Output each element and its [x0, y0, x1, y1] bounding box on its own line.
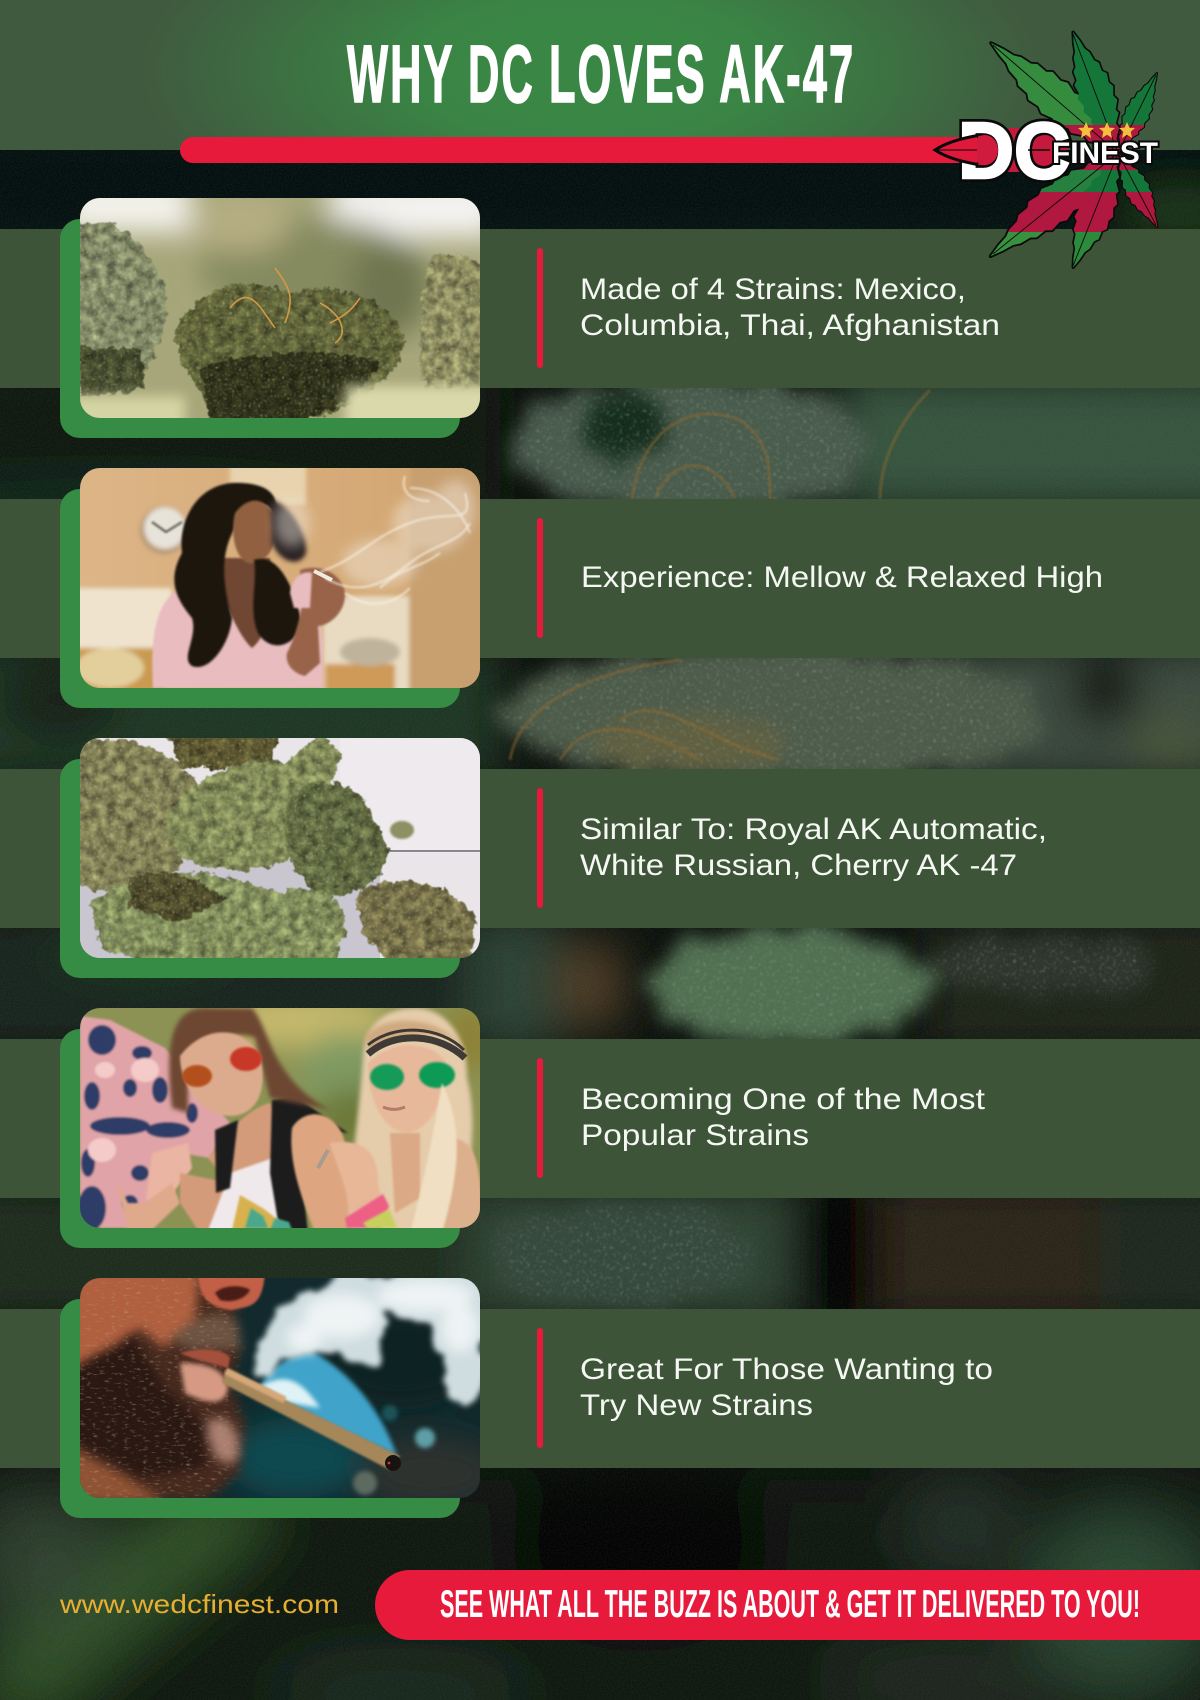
- red accent bar: [537, 248, 543, 368]
- red accent bar: [537, 1328, 543, 1448]
- red accent bar: [537, 788, 543, 908]
- text: strains: Made of 4 Strains: Mexico,: [580, 273, 966, 306]
- logo: DC Finest leaf emblem: DC: [958, 106, 1070, 195]
- title: WHY DC LOVES AK-47: [347, 28, 853, 119]
- text: similar strains: White Russian, Cherry AK -47: [580, 849, 1017, 882]
- photo: two women with sunglasses: [80, 1008, 480, 1228]
- text: strains: [580, 273, 1000, 342]
- strip: [0, 1039, 1200, 1198]
- text: similar strains: Similar To: Royal AK Automatic,: [580, 813, 1047, 846]
- text: popularity: [581, 1083, 986, 1152]
- panel: similar strains: [0, 738, 1200, 978]
- panel: experience: [0, 468, 1200, 708]
- text: new strains: Great For Those Wanting to: [580, 1353, 993, 1386]
- photo: bearded man with joint: [80, 1278, 480, 1498]
- red title bar: [180, 137, 980, 163]
- header band with green glow: [0, 0, 1200, 150]
- logo: DC Finest leaf emblem: DC: [958, 106, 1070, 195]
- photo: pile of buds: [80, 738, 480, 958]
- green card: [60, 1029, 460, 1248]
- green card: [60, 1299, 460, 1518]
- strip: [0, 499, 1200, 658]
- panel: strains origin: [0, 198, 1200, 438]
- logo: DC Finest leaf emblem: FINEST: [1052, 137, 1158, 170]
- red accent bar: [537, 1058, 543, 1178]
- green card: [60, 219, 460, 438]
- call to action pill: [375, 1570, 1200, 1640]
- text: new strains: [580, 1353, 993, 1422]
- panel: new strains: [0, 1278, 1200, 1518]
- text: experience: Experience: Mellow & Relaxed High: [581, 561, 1103, 594]
- text: popularity: Becoming One of the Most: [581, 1083, 986, 1116]
- green card: [60, 759, 460, 978]
- text: new strains: Try New Strains: [580, 1389, 813, 1422]
- text: strains: Columbia, Thai, Afghanistan: [580, 309, 1000, 342]
- panel: popularity: [0, 1008, 1200, 1248]
- text: similar strains: [580, 813, 1047, 882]
- strip: [0, 769, 1200, 928]
- photo: woman smoking: [80, 468, 480, 688]
- red accent bar: [537, 518, 543, 638]
- photo: cannabis bud close-up: [80, 198, 480, 418]
- website url: www.wedcfinest.com: [59, 1589, 339, 1619]
- strip: [0, 1309, 1200, 1468]
- logo: DC Finest leaf emblem: [932, 30, 1160, 269]
- green card: [60, 489, 460, 708]
- text: popularity: Popular Strains: [581, 1119, 809, 1152]
- strip: [0, 229, 1200, 388]
